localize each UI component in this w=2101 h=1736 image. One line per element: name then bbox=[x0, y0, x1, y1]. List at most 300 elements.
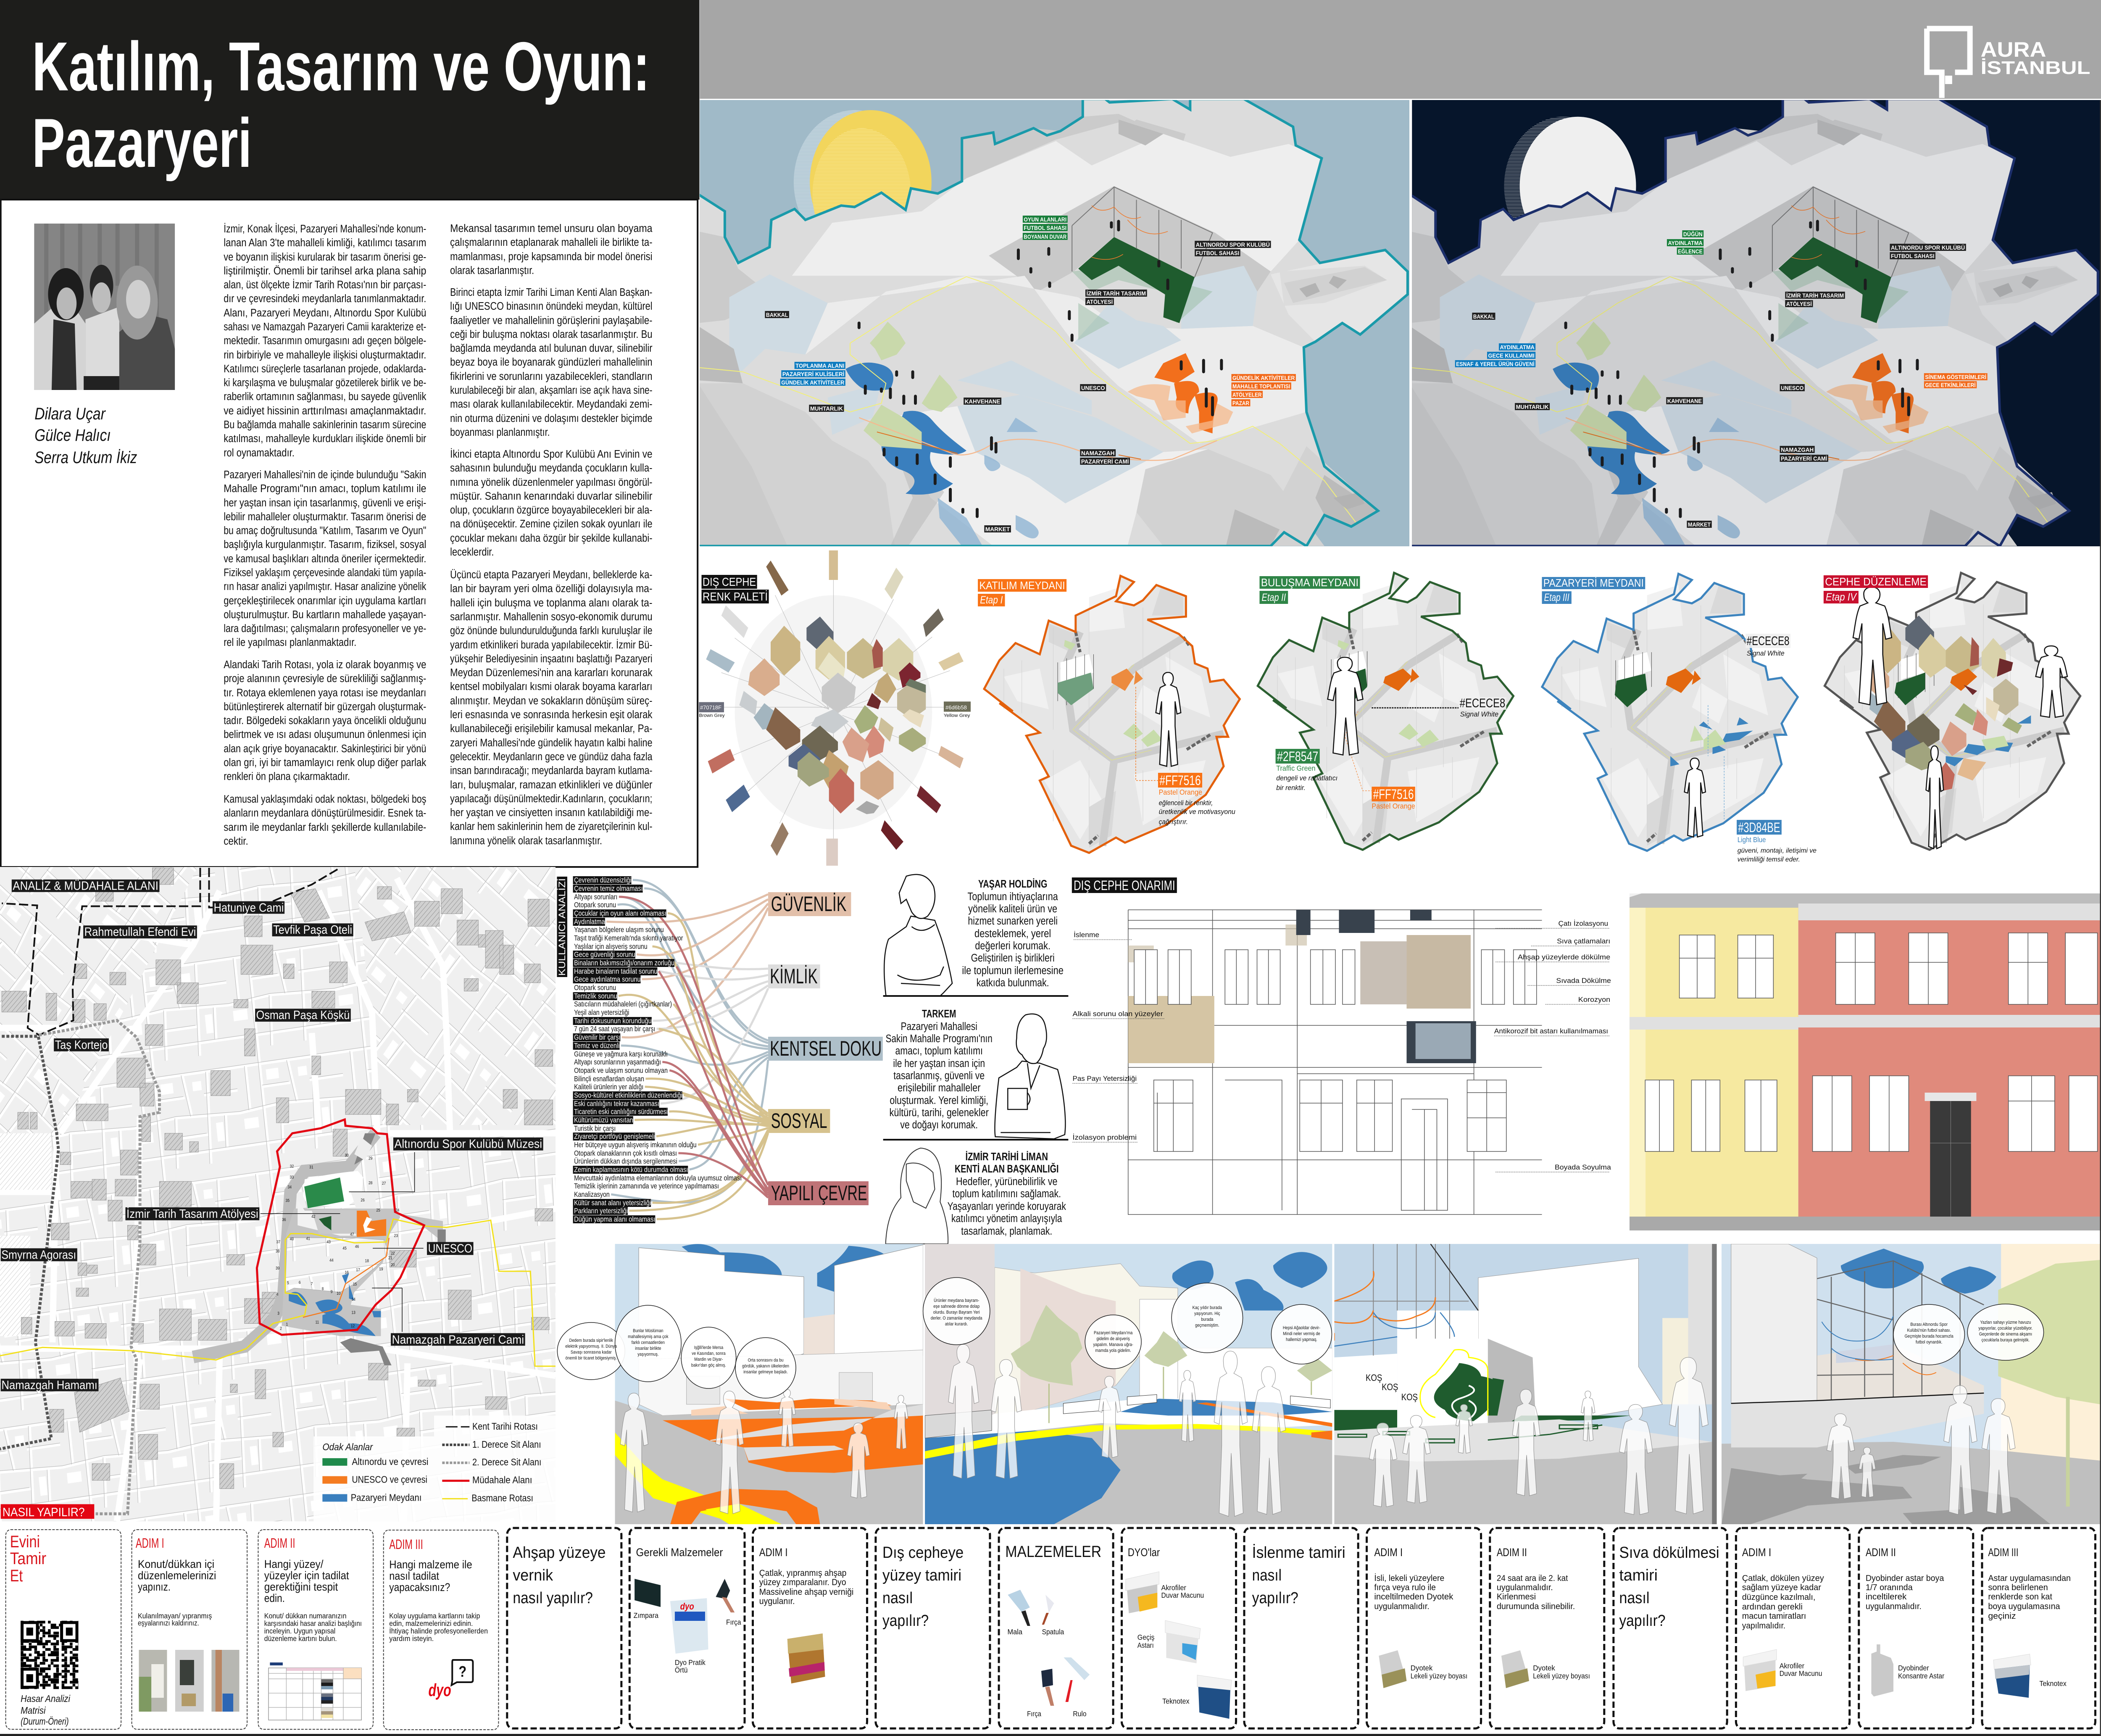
text block: column 2: sarlanmıştır. Mahallenin sosyo-ekonomik durumu bbox=[450, 611, 653, 623]
text: Tarkem: ile her yaştan insan için bbox=[893, 1057, 985, 1070]
text block: column 2: na dönüşecektir. Zemine çizilen sokak oyunları ile bbox=[450, 518, 653, 530]
card: wood step I: Massiveline ahşap verniği bbox=[759, 1587, 853, 1597]
stage 3: Pazaryeri Meydanı: Etap III bbox=[1544, 591, 1569, 603]
survey list: Düğün yapma alanı olmaması bbox=[574, 1215, 655, 1223]
text block: column 2: İkinci etapta Altınordu Spor Kulübü Anı Evinin ve bbox=[450, 448, 653, 460]
stage 1: Katılım Meydanı bbox=[978, 576, 1240, 853]
survey list: Parkların yetersizliği bbox=[574, 1207, 628, 1215]
facade problem labels: Sıva çatlamaları bbox=[1557, 938, 1610, 945]
text block: column 2: nımına yönelik düzenlenmeler yapılması öngörül- bbox=[450, 476, 653, 488]
survey list: Binaların bakımsızlığı/onarım zorluğu bbox=[574, 959, 674, 967]
survey list: Otopark ve ulaşım sorunu olmayan bbox=[574, 1066, 668, 1075]
stage 3: Pazaryeri Meydanı: verimliliği temsil eder. bbox=[1738, 856, 1800, 863]
text block: column 1: renkleri ön plana çıkarmaktadır. bbox=[224, 770, 350, 782]
panel: street scene 1 bbox=[615, 1244, 923, 1524]
building numbers: 21 bbox=[388, 1256, 392, 1260]
map labels: day: ATÖLYESİ bbox=[1087, 298, 1113, 305]
map labels: day: FUTBOL SAHASI bbox=[1024, 224, 1066, 231]
text block: column 2: bağlamda meydanda atıl bulunan duvar, silinebilir bbox=[450, 342, 653, 354]
stage 2: Buluşma Meydanı: dengeli ve rahatlatıcı bbox=[1276, 774, 1337, 782]
text block: column 1: Katılımcı süreçlerle tasarlanan projede, odaklarda- bbox=[224, 363, 426, 375]
text block: column 1: Mahalle Programı"nın amacı, toplum katılımı ile bbox=[224, 482, 426, 495]
text block: column 1: lanan Alan 3'te mahalleli kimliği, katılımcı tasarım bbox=[224, 237, 426, 249]
map place labels: NASIL YAPILIR? bbox=[3, 1505, 85, 1519]
speech bubbles: insanlar gelmeye başladı. bbox=[743, 1370, 788, 1375]
map labels: day: MAHALLE TOPLANTISI bbox=[1232, 383, 1290, 390]
text block: column 1: Bu bağlamda mahalle sakinlerinin tasarım sürecine bbox=[224, 419, 426, 431]
card: step II: karşısındaki hasar analizi başlığını bbox=[264, 1619, 362, 1628]
card: plaster step III: Astar uygulamasından bbox=[1988, 1573, 2071, 1583]
survey list: Turistik bir çarşı bbox=[574, 1124, 616, 1133]
text block: column 1: dır ve çevresindeki meydanlarla tanımlanmaktadır. bbox=[224, 292, 426, 305]
card: plaster step I bbox=[1736, 1528, 1850, 1728]
text block: column 1: ki karşılaşma ve buluşmalar gözetilerek birlik ve be- bbox=[224, 377, 426, 389]
card: soot repair heading: yapılır? bbox=[1252, 1589, 1298, 1607]
map legend: Müdahale Alanı bbox=[472, 1475, 532, 1486]
survey list: Otopark sorunu bbox=[574, 901, 616, 909]
card: wood step I: yüzey zımparalanır. Dyo bbox=[759, 1578, 846, 1587]
card: soot repair heading: İslenme tamiri bbox=[1252, 1544, 1345, 1562]
card: Evini Tamir Et: Hasar Analizi bbox=[21, 1694, 71, 1704]
category: Güvenlik: GÜVENLİK bbox=[771, 892, 846, 916]
building numbers: 11 bbox=[315, 1320, 319, 1325]
text block: column 2: ları, buluşmalar, ramazan etkinlikleri ve düğünler bbox=[450, 779, 653, 791]
facade problem labels: Pas Payı Yetersizliği bbox=[1073, 1075, 1137, 1083]
stage 3: Pazaryeri Meydanı: #3D84BE bbox=[1738, 820, 1780, 835]
intervention area bbox=[0, 1120, 556, 1366]
building numbers: 8 bbox=[322, 1286, 324, 1291]
survey list: Yeşil alan yetersizliği bbox=[574, 1008, 629, 1017]
survey list: Kanalizasyon bbox=[574, 1190, 610, 1199]
text: İzmir Tarihi Liman Kenti Alan Başkanlığı: tasarlamak, planlamak. bbox=[961, 1225, 1052, 1237]
speech bubbles: futbol oynardık. bbox=[1916, 1340, 1943, 1345]
card: step I: Konut/dükkan içi bbox=[138, 1558, 214, 1570]
speech bubbles: farklı cemaatlerden bbox=[632, 1340, 665, 1345]
stage 2: Buluşma Meydanı bbox=[1258, 573, 1514, 850]
card: plaster step II bbox=[1859, 1528, 1973, 1728]
building numbers: 1 bbox=[286, 1322, 288, 1327]
map labels: night: NAMAZGAH bbox=[1781, 446, 1814, 453]
map labels: day: ALTINORDU SPOR KULÜBÜ bbox=[1196, 241, 1270, 248]
logo: Aura İstanbul: AURA bbox=[1981, 38, 2046, 61]
play labels: koş: KOŞ bbox=[1401, 1393, 1418, 1402]
map legend: 1. Derece Sit Alanı bbox=[472, 1440, 541, 1450]
text block: column 2: nin oturma düzenini ve dolaşımı destekler biçimde bbox=[450, 412, 653, 424]
text block: column 1: her yaştan insan için tasarlanmış, güvenli ve erişi- bbox=[224, 497, 426, 509]
card: plaster step I: yapılmalıdır. bbox=[1742, 1621, 1785, 1630]
card: plaster step III: geçiniz bbox=[1988, 1611, 2016, 1620]
card: step III: nasıl tadilat bbox=[389, 1570, 439, 1582]
card: step III: İhtiyaç halinde profesyonellerden bbox=[389, 1627, 488, 1635]
card: step III: ADIM III bbox=[389, 1537, 423, 1552]
card: required materials bbox=[629, 1528, 745, 1728]
text: Tarkem: ve doğayı korumak. bbox=[900, 1119, 978, 1131]
card: plaster step I: sağlam yüzeye kadar bbox=[1742, 1583, 1821, 1592]
building numbers: 36 bbox=[282, 1217, 286, 1222]
map labels: night: SİNEMA GÖSTERİMLERİ bbox=[1925, 374, 1986, 380]
card: plaster step I: Çatlak, dökülen yüzey bbox=[1742, 1573, 1824, 1583]
card: wood varnish heading: vernik bbox=[513, 1567, 553, 1584]
map labels: night: ALTINORDU SPOR KULÜBÜ bbox=[1891, 244, 1965, 251]
speech bubbles: Kulübü'nün futbol sahası. bbox=[1907, 1328, 1951, 1333]
card: plaster repair heading bbox=[1614, 1528, 1727, 1728]
text block: column 1: katılması, mahalleyle kurdukları ilişkide önemli bir bbox=[224, 432, 426, 445]
text block: column 2: olarak tasarlanmıştır. bbox=[450, 264, 534, 277]
card: plaster step I: ardından gerekli bbox=[1742, 1602, 1803, 1611]
panel: stakeholders bbox=[883, 875, 1068, 1244]
text block: column 1: ve kamusal başlıkları altında öneriler içermektedir. bbox=[224, 553, 426, 565]
stage 1: Katılım Meydanı: Pastel Orange bbox=[1159, 788, 1202, 796]
play labels: koş: KOŞ bbox=[1366, 1373, 1382, 1383]
heading: exterior colour palette: DIŞ CEPHE bbox=[703, 576, 756, 588]
play labels: koş: KOŞ bbox=[1382, 1383, 1398, 1392]
panel: user analysis bbox=[557, 876, 883, 1223]
card: step I: Kulanılmayan/ yıpranmış bbox=[138, 1612, 212, 1620]
map place labels: Osman Paşa Köşkü bbox=[256, 1008, 350, 1022]
building numbers: 19 bbox=[379, 1267, 383, 1271]
text block: column 2: çocuklar mekanı daha özgür bir şekilde kullanabi- bbox=[450, 532, 653, 544]
text block: column 2: yükşehir Belediyesinin inşaatını başlattığı Pazaryeri bbox=[450, 653, 653, 665]
stage 2: Buluşma Meydanı: Pastel Orange bbox=[1372, 802, 1415, 810]
map legend: Basmane Rotası bbox=[471, 1493, 533, 1504]
card: plaster step II: inceltilerek bbox=[1866, 1592, 1907, 1601]
stage 1: Katılım Meydanı: KATILIM MEYDANI bbox=[979, 580, 1065, 592]
text block: column 2: leceklerdir. bbox=[450, 546, 494, 558]
building numbers: 23 bbox=[394, 1233, 398, 1238]
map labels: day: GÜNDELİK AKTİVİTELER bbox=[781, 379, 845, 386]
speech bubbles: derler. O zamanlar meydanda bbox=[931, 1316, 982, 1321]
text block: column 1: ve boyanın ilişkisi kurularak bir tasarım önerisi ge- bbox=[224, 251, 426, 263]
card: required materials: Fırça bbox=[726, 1618, 741, 1626]
text block: column 1: alanların meydanlara dönüştürülmesidir. Esnek ta- bbox=[224, 807, 426, 819]
text: Tarkem: kültürü, tarihi, gelenekler bbox=[890, 1106, 989, 1119]
stage 2: Buluşma Meydanı: #2F8547 bbox=[1277, 749, 1318, 764]
text block: column 2: fikirlerini ve sorunlarını yazabilecekleri, standların bbox=[450, 370, 653, 382]
speech bubbles: gidelim de alışveriş bbox=[1097, 1336, 1130, 1341]
text block: column 1: liştirilmiştir. Önemli bir tarihsel arka plana sahip bbox=[224, 265, 426, 277]
survey list: Ürünlerin dükkan dışında sergilenmesi bbox=[574, 1157, 677, 1165]
text block: column 1: sahası ve Namazgah Pazaryeri Camii karakterize et- bbox=[224, 321, 426, 333]
qr code bbox=[21, 1621, 78, 1689]
stage 2: Buluşma Meydanı: Signal White bbox=[1460, 711, 1498, 718]
text block: column 1: oluşturulmuştur. Bu kartların mahallede yaşayan- bbox=[224, 609, 426, 621]
card: plaster step III: boya uygulamasına bbox=[1988, 1602, 2060, 1611]
icon: speech bubble with question mark: ? bbox=[459, 1664, 466, 1681]
text block: column 1: lebilir mahalleler oluşturmaktır. Tasarım önerisi de bbox=[224, 511, 426, 523]
map labels: night bbox=[1455, 230, 1988, 528]
map place labels: ANALİZ & MÜDAHALE ALANI bbox=[13, 879, 158, 893]
building numbers: 5 bbox=[287, 1280, 289, 1285]
route lines bbox=[0, 868, 340, 1514]
text block: column 2: lanımına yönelik olarak tasarlanmıştır. bbox=[450, 835, 602, 847]
speech bubbles: olurdu. Burayı Bayram Yeri bbox=[933, 1310, 980, 1315]
map legend: Pazaryeri Meydanı bbox=[351, 1493, 421, 1503]
text block: column 1: başlığıyla kurgulanmıştır. Tasarım, fiziksel, sosyal bbox=[224, 538, 426, 551]
building numbers: 22 bbox=[391, 1251, 395, 1256]
survey list: Her bütçeye uygun alışveriş imkanının olduğu bbox=[574, 1141, 697, 1149]
title block: Katılım, Tasarım ve Oyun: bbox=[32, 28, 650, 105]
map place labels: Altınordu Spor Kulübü Müzesi bbox=[395, 1137, 542, 1151]
panel: street scene 4 bbox=[1722, 1244, 2100, 1524]
speech bubbles: yaşıyormuş. bbox=[637, 1352, 658, 1357]
speech bubbles: insanlar birlikte bbox=[635, 1346, 661, 1351]
card: soot step I: Lekeli yüzey boyası bbox=[1411, 1672, 1467, 1680]
text: Tarkem: Pazaryeri Mahallesi bbox=[901, 1020, 977, 1033]
speech bubbles: gördük, yakanın ülkelerden bbox=[742, 1364, 789, 1369]
survey list: Eski canlılığını tekrar kazanması bbox=[574, 1099, 659, 1108]
card: DYO products: DYO'lar bbox=[1128, 1546, 1160, 1559]
survey list: Zemin kaplamasının kötü durumda olması bbox=[574, 1165, 688, 1174]
survey list: Otopark olanaklarının çok kısıtlı olması bbox=[574, 1149, 677, 1157]
text block: column 2: faaliyetler ve mahallelinin görüşlerini paylaşabile- bbox=[450, 314, 653, 327]
text: Yaşar Holding bbox=[962, 878, 1064, 989]
panel: site analysis map bbox=[0, 866, 556, 1521]
building numbers: 31 bbox=[309, 1165, 313, 1170]
building numbers: 3 bbox=[277, 1311, 279, 1316]
category: Kentsel Doku: KENTSEL DOKU bbox=[770, 1037, 882, 1060]
text block: column 2: boyanması planlanmıştır. bbox=[450, 426, 550, 438]
building numbers: 2 bbox=[280, 1326, 282, 1331]
building numbers: 28 bbox=[369, 1181, 372, 1185]
map place labels: Namazgah Pazaryeri Cami bbox=[392, 1333, 524, 1346]
photo: authors bbox=[34, 224, 175, 390]
stage 2: Buluşma Meydanı: BULUŞMA MEYDANI bbox=[1261, 577, 1359, 589]
logo: Aura İstanbul: İSTANBUL bbox=[1981, 57, 2090, 78]
text block: column 2: kanlar hem sakinlerinin hem de ziyaretçilerinin kul- bbox=[450, 820, 653, 832]
text block: column 2: Üçüncü etapta Pazaryeri Meydanı, belleklerde ka- bbox=[450, 569, 653, 581]
survey list: Temizlik işlerinin zamanında ve yeterince yapılmaması bbox=[574, 1182, 719, 1190]
card: soot step I: inceltilmeden Dyotek bbox=[1374, 1592, 1453, 1601]
survey list: Güvenilir bir çarşı bbox=[574, 1033, 620, 1041]
stage 3: Pazaryeri Meydanı bbox=[1542, 574, 1817, 863]
survey list: Harabe binaların tadilat sorunu bbox=[574, 967, 657, 975]
speech bubbles: Yazları sahayı yüzme havuzu bbox=[1980, 1320, 2031, 1325]
card: step II: yüzeyler için tadilat bbox=[264, 1569, 349, 1582]
card: required materials: Dyo Pratik bbox=[675, 1658, 706, 1667]
map labels: day: PAZARYERİ KULİSLERİ bbox=[782, 371, 844, 377]
cards: how to repair bbox=[6, 1528, 2095, 1730]
building numbers: 15 bbox=[353, 1282, 357, 1286]
panel: night isometric map bbox=[1409, 99, 2101, 546]
card: facade repair heading bbox=[876, 1528, 990, 1728]
facade problem labels: Sıvada Dökülme bbox=[1556, 977, 1611, 985]
building numbers: 43 bbox=[326, 1240, 331, 1244]
palette codes bbox=[699, 704, 971, 718]
survey list: Çevrenin temiz olmaması bbox=[574, 884, 643, 893]
authors names bbox=[34, 404, 137, 467]
survey list: Kültürümüzü yansıtan bbox=[574, 1116, 633, 1124]
speech bubbles: Geçmişte burada hocamızla bbox=[1905, 1334, 1954, 1339]
building numbers: 25 bbox=[376, 1208, 380, 1212]
speech bubbles: Bunlar Müslüman bbox=[633, 1328, 663, 1333]
palette blocks bbox=[699, 551, 971, 866]
stage 1: Katılım Meydanı: Etap I bbox=[980, 594, 1003, 606]
text block: column 2: Meydan Düzenlemesi'nin ana kararları korunarak bbox=[450, 666, 653, 679]
palette codes: #6d6b58 bbox=[945, 704, 967, 711]
text block: column 1: olan gri, iyi bir tamamlayıcı renk olup diğer parlak bbox=[224, 756, 427, 769]
survey list bbox=[573, 876, 742, 1223]
speech bubbles: Dedem burada sipir'lenlik bbox=[569, 1338, 613, 1343]
map labels: night: BAKKAL bbox=[1473, 313, 1494, 320]
authors names: Dilara Uçar bbox=[34, 404, 106, 423]
speech bubbles: Kaç yıldır burada bbox=[1193, 1305, 1222, 1310]
building numbers: 20 bbox=[391, 1263, 395, 1267]
card: plaster step II: Dyobinder astar boya bbox=[1866, 1573, 1944, 1583]
survey list: Ticaretin eski canlılığını sürdürmesi bbox=[574, 1107, 668, 1116]
text block: column 2: Birinci etapta İzmir Tarihi Liman Kenti Alan Başkan- bbox=[450, 286, 653, 298]
top grey band bbox=[700, 0, 2101, 99]
survey list: Kültür sanat alanı yetersizliği bbox=[574, 1199, 651, 1207]
map legend: Altınordu ve çevresi bbox=[352, 1457, 428, 1467]
map labels: day: GÜNDELİK AKTİVİTELER bbox=[1232, 374, 1295, 381]
text block: column 2: halleli için buluşma ve toplanma alanı olarak ta- bbox=[450, 597, 653, 609]
card: DYO products: Geçiş bbox=[1137, 1633, 1154, 1641]
text block: column 2: olup, çocukların özgürce boyayabilecekleri bir ala- bbox=[450, 504, 653, 516]
street scene people bbox=[620, 1344, 2015, 1516]
card: plaster repair heading: nasıl bbox=[1619, 1589, 1649, 1607]
card: step III: Kolay uygulama kartlarını takip bbox=[389, 1612, 480, 1620]
card: step III: yapacaksınız? bbox=[389, 1581, 450, 1594]
text: Tarkem: TARKEM bbox=[922, 1008, 956, 1020]
logo: dyo: dyo bbox=[428, 1681, 451, 1700]
stage 2: Buluşma Meydanı: bir renktir. bbox=[1276, 784, 1306, 792]
building numbers: 39 bbox=[276, 1266, 279, 1270]
building numbers: 17 bbox=[356, 1268, 360, 1272]
stage 4: Cephe Düzenleme bbox=[1824, 573, 2080, 850]
building numbers: 6 bbox=[299, 1280, 301, 1285]
map labels: day: BOYANAN DUVAR bbox=[1024, 233, 1067, 240]
card: required materials: Gerekli Malzemeler bbox=[636, 1546, 723, 1559]
map labels: night: ESNAF & YEREL ÜRÜN GÜVENİ bbox=[1456, 361, 1535, 367]
stage 1: Katılım Meydanı: üretkenlik ve motivasyonu bbox=[1159, 808, 1235, 816]
map labels: night: PAZARYERİ CAMİ bbox=[1781, 455, 1827, 462]
building numbers: 18 bbox=[365, 1259, 369, 1263]
text: İzmir Tarihi Liman Kenti Alan Başkanlığı: katılımcı yönetim anlayışıyla bbox=[951, 1212, 1062, 1225]
text: İzmir Tarihi Liman Kenti Alan Başkanlığı: KENTİ ALAN BAŞKANLIĞI bbox=[955, 1162, 1058, 1175]
stage 1: Katılım Meydanı: çağrıştırır. bbox=[1159, 818, 1188, 826]
building numbers: 29 bbox=[369, 1156, 372, 1161]
text block: column 1: tır. Rotaya eklemlenen yaya rotası ise meydanları bbox=[224, 687, 426, 699]
speech bubbles: Pazaryeri Meydanı'ma bbox=[1094, 1330, 1133, 1336]
map labels: night: KAHVEHANE bbox=[1667, 398, 1702, 404]
text block: column 1: Alanı, Pazaryeri Meydanı, Altınordu Spor Kulübü bbox=[224, 307, 426, 319]
text block: column 2: lığı UNESCO binasının önündeki meydan, kültürel bbox=[450, 300, 653, 312]
text: İzmir Tarihi Liman Kenti Alan Başkanlığı: toplum katılımını sağlamak. bbox=[953, 1188, 1061, 1200]
speech bubbles: burada bbox=[1201, 1317, 1214, 1322]
illustration: woman with crossed arms bbox=[884, 875, 952, 996]
text block: column 1: Alandaki Tarih Rotası, yola iz olarak boyanmış ve bbox=[224, 659, 426, 671]
card: wood varnish heading: Ahşap yüzeye bbox=[513, 1544, 606, 1562]
map labels: night: UNESCO bbox=[1781, 385, 1803, 391]
map labels: day: ATÖLYELER bbox=[1232, 391, 1262, 398]
card: wood varnish heading: nasıl yapılır? bbox=[513, 1589, 593, 1607]
map labels: day: NAMAZGAH bbox=[1081, 450, 1115, 456]
stage 2: Buluşma Meydanı: Etap II bbox=[1262, 591, 1286, 603]
card: plaster step II: 1/7 oranında bbox=[1866, 1583, 1913, 1592]
building numbers: 46 bbox=[355, 1244, 359, 1249]
text: Yaşar Holding: ile toplumun ilerlemesine bbox=[962, 964, 1064, 977]
building numbers: 27 bbox=[382, 1181, 386, 1185]
card: materials bbox=[999, 1528, 1113, 1728]
card: plaster step III: Teknotex bbox=[2039, 1679, 2067, 1688]
card: plaster step I: Duvar Macunu bbox=[1780, 1669, 1822, 1678]
building numbers: 44 bbox=[329, 1258, 334, 1262]
heading: exterior colour palette: RENK PALETİ bbox=[703, 590, 768, 603]
palette codes: Brown Grey bbox=[699, 713, 725, 718]
facade problem labels: Çatı İzolasyonu bbox=[1558, 919, 1608, 927]
building numbers: 42 bbox=[311, 1214, 316, 1219]
building numbers: 37 bbox=[276, 1240, 280, 1244]
palette codes: #70718F bbox=[700, 704, 721, 711]
speech bubbles: çocuklarla buraya gelmiştik. bbox=[1982, 1338, 2030, 1343]
stage 3: Pazaryeri Meydanı: #ECECE8 bbox=[1747, 634, 1789, 648]
card: plaster repair heading: tamiri bbox=[1619, 1567, 1658, 1584]
card: required materials: dyo bbox=[680, 1602, 694, 1612]
text block: column 2: beyaz boya ile boyanarak gündüzleri mahallelinin bbox=[450, 356, 653, 368]
map labels: day: FUTBOL SAHASI bbox=[1196, 250, 1239, 256]
text block: column 1: alan, üst ölçekte İzmir Tarih Rotası'nın bir parçası- bbox=[224, 279, 426, 291]
speech bubbles: Burası Altınordu Spor bbox=[1910, 1322, 1948, 1327]
panel: day isometric map bbox=[698, 99, 1409, 546]
speech bubbles: eşe sahnede dönme dolap bbox=[933, 1304, 979, 1309]
text block: column 2: ması olarak kullanılabilecektir. Meydandaki zemi- bbox=[450, 398, 653, 410]
card: plaster step II: Konsantre Astar bbox=[1898, 1672, 1945, 1680]
photos: cluttered rooms bbox=[139, 1650, 239, 1712]
text block: column 2 bbox=[450, 222, 653, 847]
card: wood step I: uygulanır. bbox=[759, 1596, 795, 1606]
facade problem labels: Korozyon bbox=[1578, 996, 1610, 1004]
card: soot step I: İsli, lekeli yüzeylere bbox=[1374, 1573, 1444, 1583]
text block: column 2: Mekansal tasarımın temel unsuru olan boyama bbox=[450, 222, 653, 234]
building numbers: 33 bbox=[290, 1175, 294, 1179]
speech bubbles: Mardin ve Diyar- bbox=[694, 1357, 723, 1362]
map legend: UNESCO ve çevresi bbox=[352, 1475, 427, 1485]
card: Evini Tamir Et bbox=[6, 1530, 121, 1729]
speech bubbles: Orta sonrasını da bu bbox=[748, 1358, 783, 1363]
card: plaster step III: sonra belirlenen bbox=[1988, 1583, 2048, 1592]
card: plaster step II: ADIM II bbox=[1866, 1546, 1896, 1559]
survey list: 7 gün 24 saat yaşayan bir çarşı bbox=[574, 1025, 655, 1033]
map labels: night: AYDINLATMA bbox=[1668, 240, 1703, 246]
text block: column 2: her yaştan ve cinsiyetten insanın katılabildiği me- bbox=[450, 806, 653, 819]
card: soot repair heading bbox=[1244, 1528, 1358, 1728]
card: wood step I: ADIM I bbox=[759, 1546, 788, 1559]
text: İzmir Tarihi Liman Kenti Alan Başkanlığı: İZMİR TARİHİ LİMAN bbox=[965, 1151, 1048, 1163]
text block: column 1: cektir. bbox=[224, 835, 248, 847]
text: Tarkem: tasarlanmış, güvenli ve bbox=[893, 1070, 985, 1082]
map labels: night: GECE KULLANIMI bbox=[1488, 352, 1535, 359]
building numbers: 16 bbox=[345, 1270, 349, 1275]
map place labels: Tevfik Paşa Oteli bbox=[273, 923, 352, 937]
text: Yaşar Holding: Toplumun ihtiyaçlarına bbox=[968, 890, 1058, 903]
panel: street scene 3 bbox=[1334, 1244, 1717, 1524]
card: step I: yapınız. bbox=[138, 1581, 171, 1593]
map place labels: UNESCO bbox=[428, 1241, 472, 1255]
stage 2: Buluşma Meydanı: #FF7516 bbox=[1373, 787, 1414, 802]
heading: DIŞ CEPHE ONARIMI bbox=[1074, 878, 1175, 893]
map labels: day: MARKET bbox=[985, 526, 1010, 532]
speech bubbles: hallemizi yapmaq. bbox=[1286, 1337, 1317, 1342]
map labels: day bbox=[765, 216, 1296, 532]
text block: column 2: leri esnasında ve sonrasında herkesin eşit olarak bbox=[450, 709, 653, 721]
survey list: Taşıt trafiği Kemeraltı'nda sıkıntı yaratıyor bbox=[574, 934, 683, 942]
card: facade repair heading: nasıl bbox=[882, 1589, 913, 1607]
speech bubbles: Savaşı sonrasına kadar bbox=[571, 1350, 612, 1355]
card: soot repair heading: nasıl bbox=[1252, 1567, 1282, 1584]
map legend: 2. Derece Sit Alanı bbox=[472, 1457, 541, 1467]
card: required materials: Örtü bbox=[675, 1666, 687, 1674]
card: plaster repair heading: Sıva dökülmesi bbox=[1619, 1544, 1719, 1562]
